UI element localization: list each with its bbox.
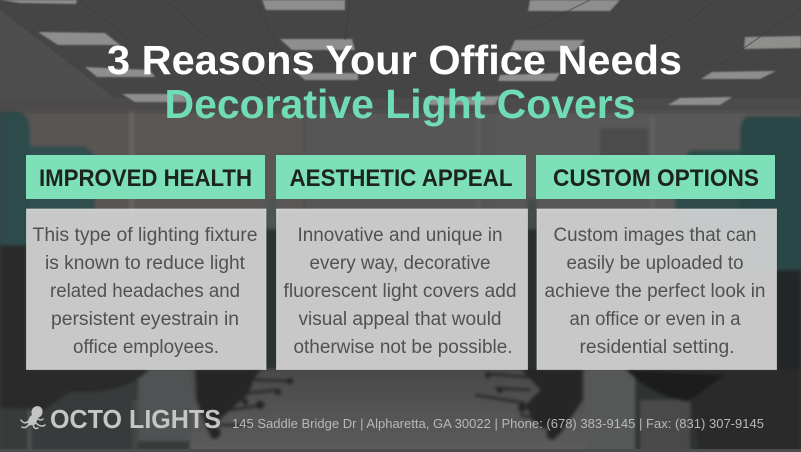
body text: related headaches and	[50, 281, 240, 302]
footer	[21, 404, 764, 434]
title	[107, 37, 682, 127]
icon: octopus logo	[21, 405, 45, 428]
floor	[190, 369, 610, 452]
body text: fluorescent light covers add	[284, 281, 516, 302]
body text	[544, 225, 766, 358]
heading box	[276, 155, 526, 199]
body text: residential setting.	[580, 337, 734, 358]
body text: otherwise not be possible.	[294, 337, 512, 358]
company name: OCTO LIGHTS	[50, 404, 221, 434]
title line 2: Decorative Light Covers	[164, 81, 636, 127]
contact line: 145 Saddle Bridge Dr | Alpharetta, GA 30022 | Phone: (678) 383-9145 | Fax: (831) 307-9145	[232, 416, 764, 431]
chairs	[195, 369, 583, 440]
body text: every way, decorative	[310, 253, 490, 274]
panel: aesthetic appeal	[276, 155, 528, 370]
body text: achieve the perfect look in	[544, 281, 766, 302]
body box	[276, 209, 528, 370]
body text: This type of lighting fixture	[32, 225, 258, 246]
body text: easily be uploaded to	[566, 253, 744, 274]
body text: Innovative and unique in	[298, 225, 502, 246]
heading: CUSTOM OPTIONS	[553, 165, 759, 192]
body box	[537, 209, 776, 370]
body text: is known to reduce light	[45, 253, 246, 274]
panel: improved health	[26, 155, 266, 370]
teal partitions	[0, 112, 30, 245]
body text: an office or even in a	[570, 309, 741, 330]
body text	[32, 225, 258, 358]
panel: custom options	[536, 155, 776, 370]
heading: AESTHETIC APPEAL	[290, 165, 512, 192]
heading: IMPROVED HEALTH	[39, 165, 252, 192]
heading box	[536, 155, 775, 199]
heading box	[26, 155, 265, 199]
body text: Custom images that can	[554, 225, 756, 246]
body text	[284, 225, 516, 358]
body box	[26, 209, 266, 370]
body text: persistent eyestrain in	[51, 309, 239, 330]
body text: office employees.	[73, 337, 219, 358]
title line 1: 3 Reasons Your Office Needs	[107, 37, 682, 83]
body text: visual appeal that would	[298, 309, 502, 330]
